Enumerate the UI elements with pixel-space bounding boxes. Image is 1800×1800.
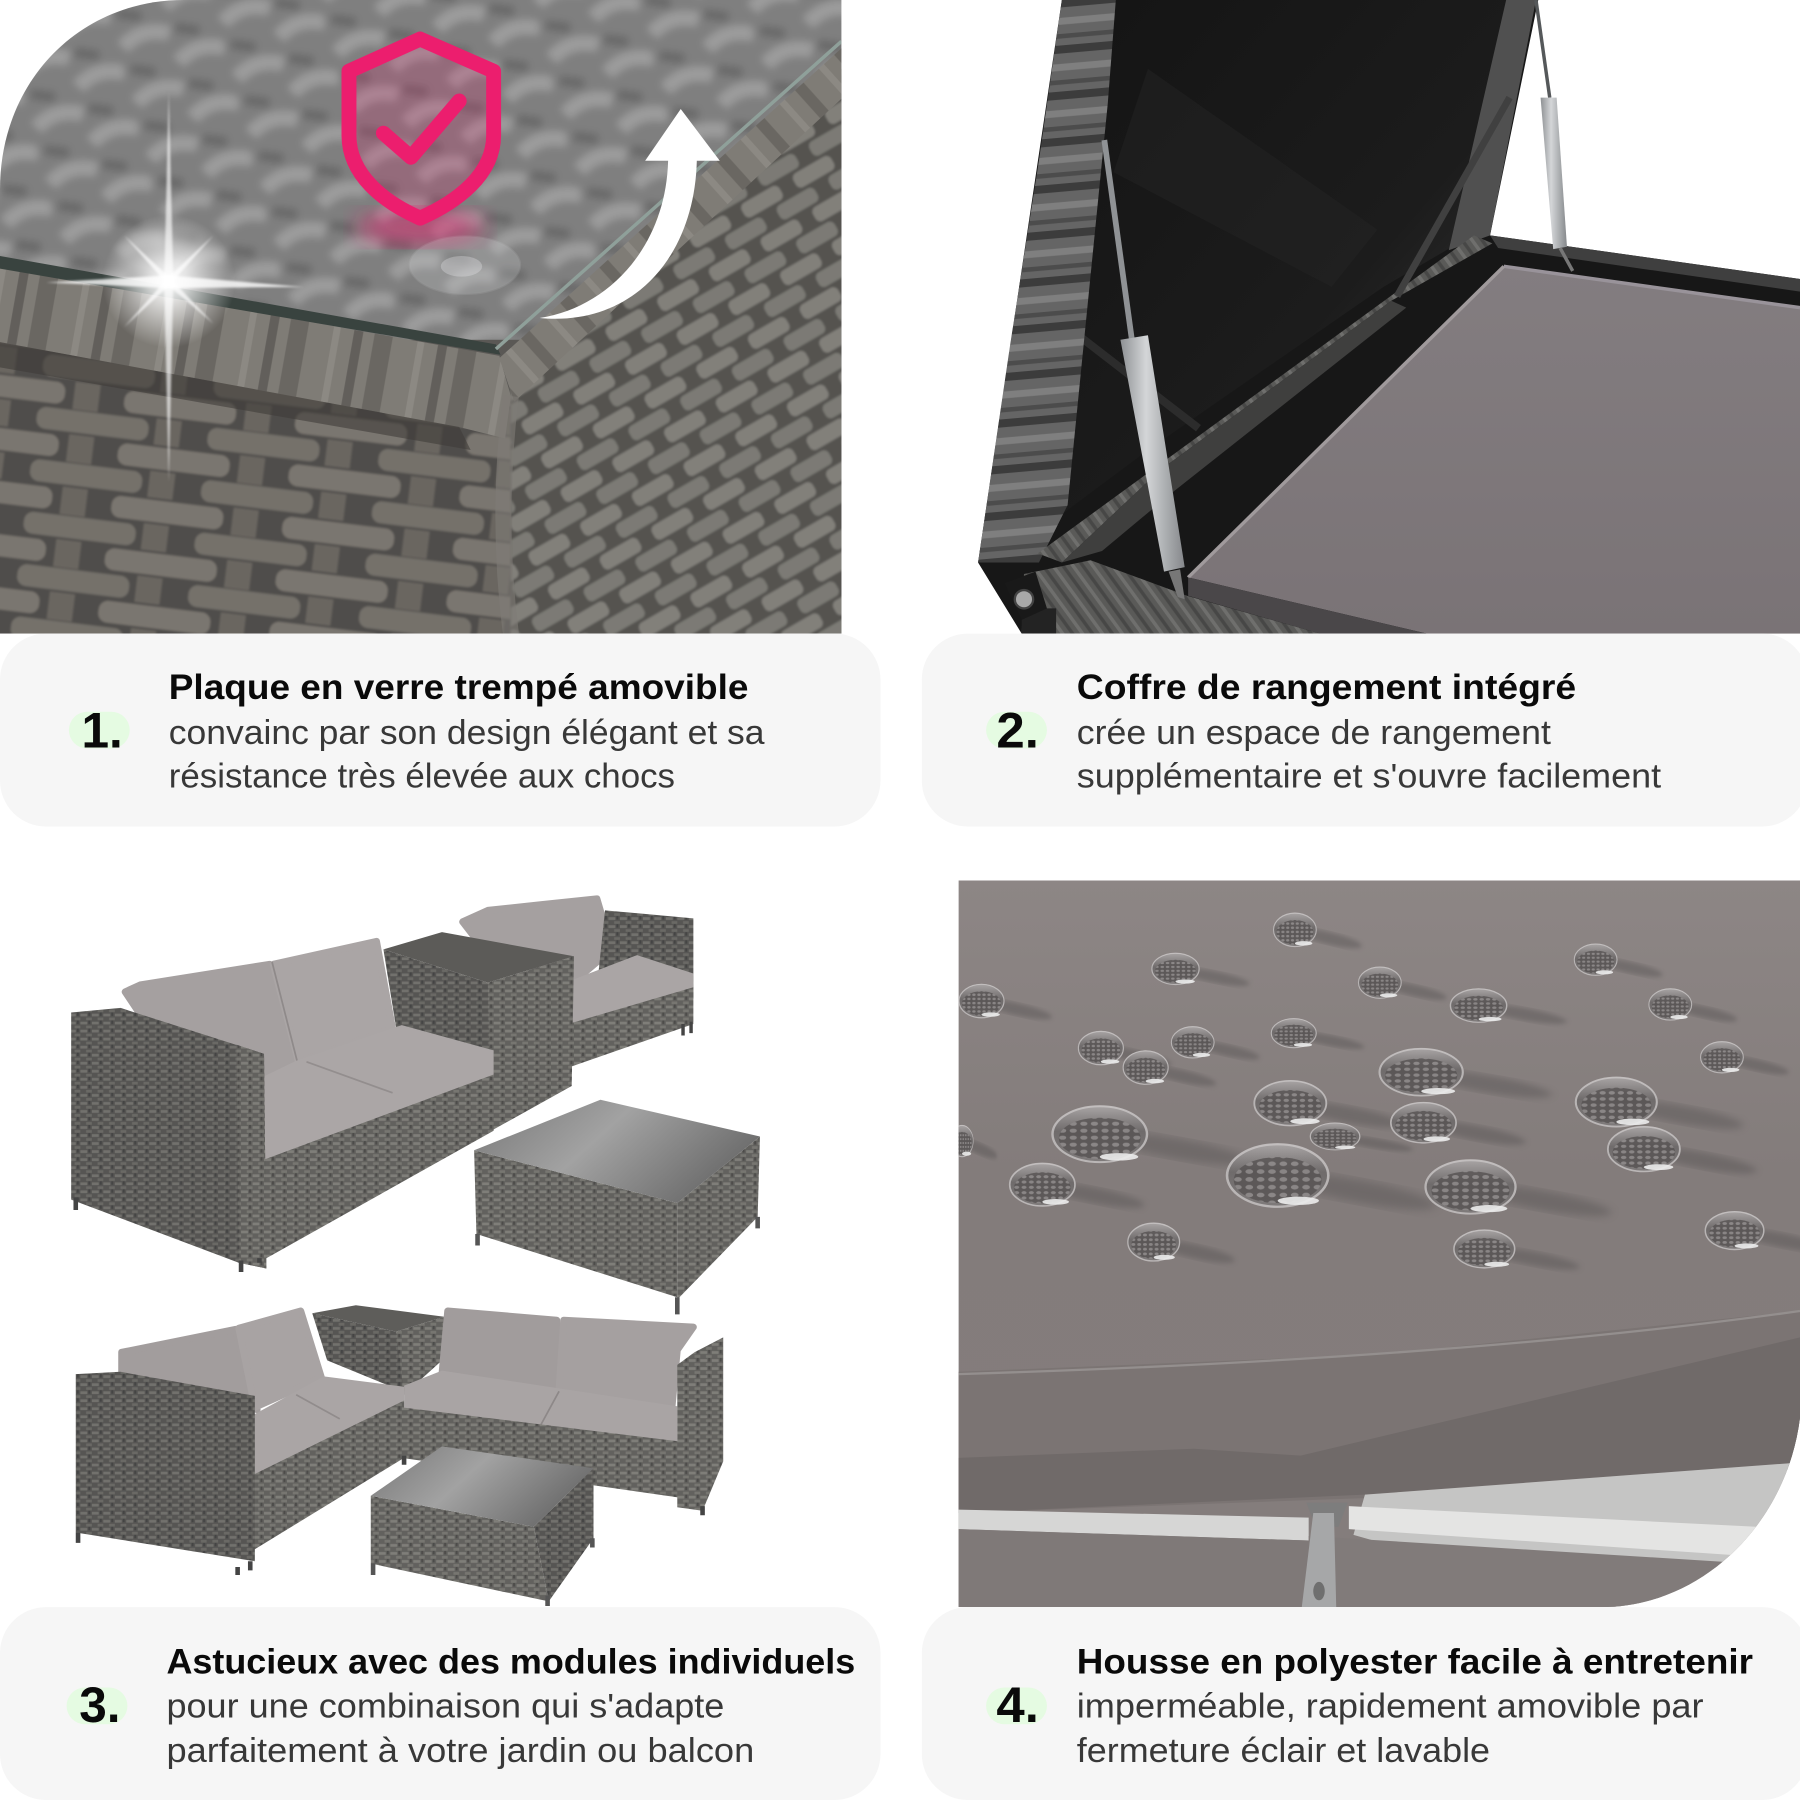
number badge 3: 3.: [79, 1676, 121, 1733]
card 1 heading: Plaque en verre trempé amovible: [169, 667, 748, 707]
card 2 body: [1077, 714, 1662, 796]
number badge 4: [986, 1676, 1047, 1733]
lid brace rod: [1397, 98, 1510, 296]
coffee table large: [474, 1100, 760, 1314]
card 1 body: résistance très élevée aux chocs: [169, 758, 675, 796]
card 2 body: crée un espace de rangement: [1077, 714, 1551, 752]
card 2 heading: Coffre de rangement intégré: [1077, 667, 1576, 707]
card 3: [0, 1607, 880, 1800]
number badge 3: [67, 1676, 127, 1733]
card 3 body: parfaitement à votre jardin ou balcon: [166, 1732, 754, 1770]
card 4 body: [1077, 1687, 1704, 1770]
sofa: corner arrangement: [76, 1305, 723, 1606]
card 4: [922, 1607, 1800, 1800]
zipper: [959, 1462, 1800, 1607]
number badge 4: 4.: [996, 1676, 1039, 1733]
number badge 2: [986, 701, 1047, 758]
icon: white lift arrow: [540, 109, 720, 319]
card 1 body: convainc par son design élégant et sa: [169, 714, 765, 752]
card 1 body: [169, 714, 765, 796]
water droplets: [951, 913, 1800, 1274]
panel 2: storage box photo: [978, 0, 1800, 634]
card 3 body: pour une combinaison qui s'adapte: [166, 1687, 724, 1725]
coffee table small: [371, 1446, 593, 1606]
card 3 body: [166, 1687, 754, 1770]
icon: shield with check mark: [349, 39, 494, 246]
number badge 1: [69, 701, 130, 758]
sofa: long arrangement: [71, 899, 760, 1314]
number badge 2: 2.: [996, 701, 1039, 758]
number badge 1: 1.: [82, 701, 123, 758]
panel 1: glass top photo: [0, 0, 864, 654]
card 2: [922, 634, 1800, 827]
suction cup under glass: [410, 236, 520, 294]
icon: hinge bracket with bolt: [1014, 572, 1047, 620]
card 3 heading: Astucieux avec des modules individuels: [166, 1642, 855, 1682]
panel 4: waterproof cushion photo: [951, 880, 1800, 1607]
card 1: [0, 634, 880, 827]
glass sparkle: [46, 92, 304, 482]
cushion side seam: [959, 1311, 1800, 1513]
panel 3: sofa configurations: [71, 899, 760, 1606]
right gas strut: [1536, 0, 1573, 271]
card 4 body: imperméable, rapidement amovible par: [1077, 1687, 1704, 1725]
card 4 heading: Housse en polyester facile à entretenir: [1077, 1642, 1753, 1682]
card 2 body: supplémentaire et s'ouvre facilement: [1077, 758, 1662, 796]
card 4 body: fermeture éclair et lavable: [1077, 1732, 1490, 1770]
left gas strut: [1104, 140, 1185, 599]
